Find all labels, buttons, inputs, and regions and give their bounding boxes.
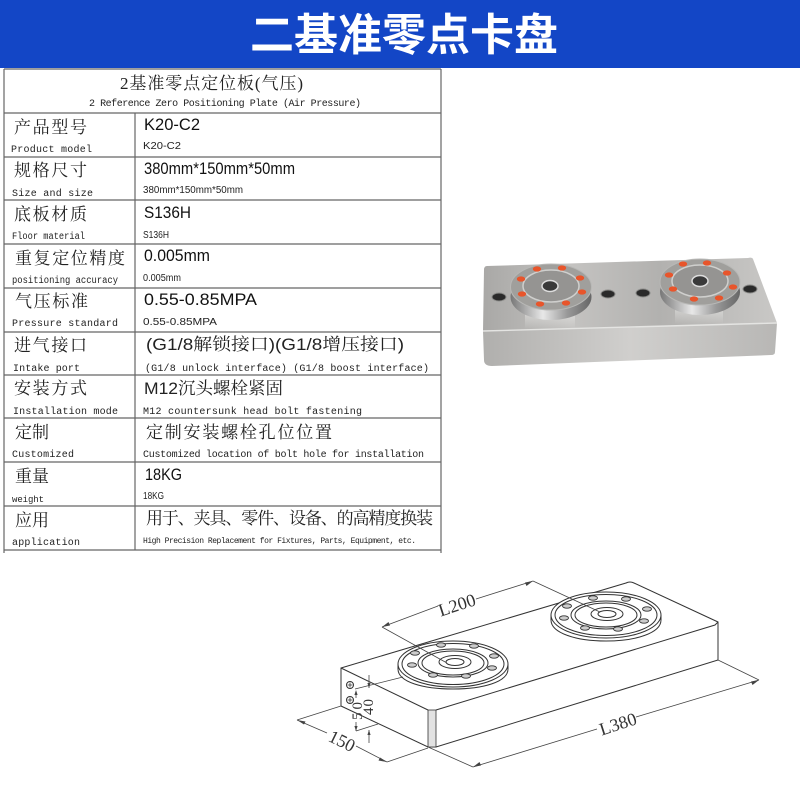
row: positioning accuracy — [12, 246, 210, 287]
row: pressure standard: 气压标准 — [15, 292, 88, 311]
side port screws — [346, 682, 354, 704]
row: intake port: Intake port — [13, 363, 80, 375]
row: installation mode: 安装方式 — [14, 379, 87, 398]
row: weight: 18KG — [145, 465, 182, 484]
title banner: 二基准零点卡盘 — [250, 11, 558, 60]
table heading — [89, 74, 361, 110]
row: application — [12, 509, 433, 549]
dimension L200: L200 — [436, 590, 478, 620]
technical drawing with dimensions — [297, 581, 759, 767]
table heading: 2 Reference Zero Positioning Plate (Air Pressure) — [89, 98, 361, 110]
row: customized — [12, 423, 424, 461]
row: product model: Product model — [11, 144, 92, 156]
row: positioning accuracy: 0.005mm — [143, 273, 181, 284]
row: customized: 定制安装螺栓孔位位置 — [146, 423, 332, 442]
right chuck — [660, 259, 740, 315]
plate body — [483, 258, 777, 366]
row: installation mode — [13, 379, 362, 418]
right chuck bolts — [560, 596, 652, 631]
row: weight — [12, 465, 182, 505]
row: pressure standard: 0.55-0.85MPA — [143, 317, 217, 328]
row: weight: weight — [12, 495, 44, 505]
dimension L380: L380 — [597, 709, 639, 739]
product photo: metal plate with two chucks — [483, 258, 777, 366]
row: application: 用于、夹具、零件、设备、的高精度换装 — [146, 509, 433, 528]
title banner — [0, 0, 800, 68]
row: intake port: 进气接口 — [14, 336, 87, 355]
left chuck — [510, 264, 592, 320]
row: application: 应用 — [15, 511, 49, 530]
row: floor material: S136H — [143, 230, 169, 241]
row: size: Size and size — [12, 188, 93, 200]
row: floor material: Floor material — [12, 231, 85, 243]
row: positioning accuracy: positioning accuracy — [12, 275, 118, 287]
row: positioning accuracy: 重复定位精度 — [15, 249, 125, 268]
row: product model: K20-C2 — [144, 115, 200, 134]
dimension 150: 150 — [325, 726, 359, 756]
dimension 150 — [297, 706, 428, 762]
row: weight: 重量 — [15, 467, 49, 486]
right chuck outline — [551, 592, 661, 641]
row: size: 规格尺寸 — [14, 161, 87, 180]
dimension L380 — [428, 660, 759, 767]
left chuck outline — [398, 641, 508, 689]
row: floor material: S136H — [144, 203, 191, 222]
dimension 40 — [361, 675, 377, 743]
row: customized: Customized — [12, 449, 74, 461]
row: intake port: (G1/8解锁接口)(G1/8增压接口) — [146, 334, 404, 354]
row: customized: 定制 — [15, 423, 49, 442]
table grid — [4, 69, 441, 553]
dimension 40: 40 — [361, 699, 377, 715]
row: size: 380mm*150mm*50mm — [144, 159, 295, 178]
row: installation mode: M12沉头螺栓紧固 — [144, 379, 283, 398]
row: floor material: 底板材质 — [14, 205, 87, 224]
row: application: High Precision Replacement for Fixtures, Parts, Equipment, etc. — [143, 537, 416, 546]
row: product model: K20-C2 — [143, 141, 181, 152]
row: intake port: (G1/8 unlock interface) (G1/8 boost interface) — [145, 363, 429, 375]
table heading: 2基准零点定位板(气压) — [120, 74, 303, 93]
row: product model: 产品型号 — [14, 118, 87, 137]
row: weight: 18KG — [143, 491, 164, 502]
row: intake port — [13, 334, 429, 375]
row: positioning accuracy: 0.005mm — [144, 246, 210, 265]
row: application: application — [12, 537, 80, 549]
row: size — [12, 159, 295, 200]
row: size: 380mm*150mm*50mm — [143, 185, 243, 196]
row: installation mode: Installation mode — [13, 406, 118, 418]
plate holes — [492, 285, 757, 301]
left chuck bolts — [408, 643, 498, 678]
dimension L200 — [382, 581, 600, 663]
row: installation mode: M12 countersunk head bolt fastening — [143, 406, 362, 418]
dimension 50: 50 — [350, 702, 366, 720]
row: floor material — [12, 203, 191, 243]
dimension 50 — [350, 677, 403, 731]
row: pressure standard: 0.55-0.85MPA — [144, 290, 258, 309]
row: pressure standard: Pressure standard — [12, 318, 118, 330]
row: product model — [11, 115, 200, 156]
specification table — [4, 69, 441, 553]
block outline — [341, 582, 718, 747]
row: customized: Customized location of bolt hole for installation — [143, 449, 424, 461]
row: pressure standard — [12, 290, 258, 330]
